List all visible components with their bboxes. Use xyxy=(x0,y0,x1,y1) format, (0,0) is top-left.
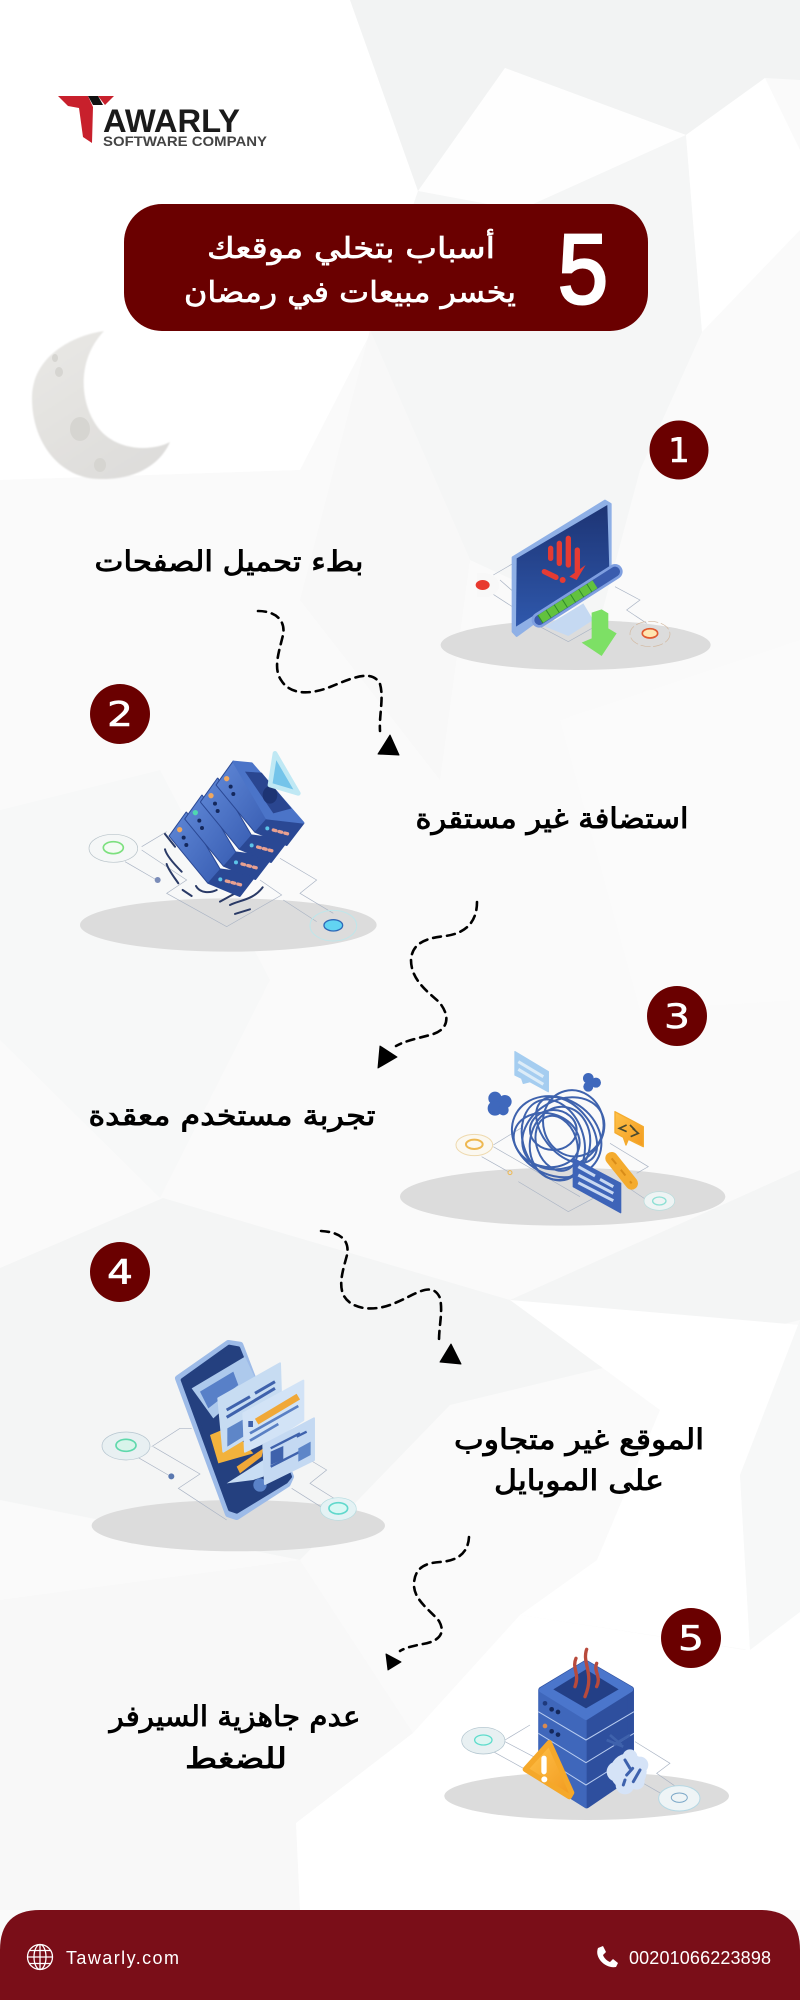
step 2 badge xyxy=(90,684,150,744)
heading text xyxy=(184,228,516,310)
step 4 label: على الموبايل xyxy=(494,1464,664,1497)
step 3 illustration: tangled UX xyxy=(400,1052,725,1226)
logo: Tawarly: SOFTWARE COMPANY xyxy=(103,133,268,149)
step 4 badge xyxy=(90,1242,150,1302)
heading text: يخسر مبيعات في رمضان xyxy=(184,275,516,310)
step 1 badge xyxy=(650,420,708,480)
step 5 label xyxy=(107,1700,360,1775)
step 4 label: الموقع غير متجاوب xyxy=(454,1423,704,1456)
server layer 4 xyxy=(170,813,256,896)
server layer 1 with top xyxy=(217,762,303,845)
server layer 2 xyxy=(201,779,288,862)
step 1 illustration: slow monitor xyxy=(441,501,711,670)
step 5 label: عدم جاهزية السيرفر xyxy=(107,1700,360,1733)
crescent moon xyxy=(32,331,170,479)
step 5 label: للضغط xyxy=(185,1742,287,1775)
footer bar xyxy=(0,1910,800,2000)
step 2 label: استضافة غير مستقرة xyxy=(416,802,688,835)
step 5 illustration: overheated server xyxy=(444,1649,729,1820)
heading text: أسباب بتخلي موقعك xyxy=(207,228,495,266)
step 5 badge: 5 xyxy=(678,1619,704,1659)
server layer 3 xyxy=(185,796,272,879)
step 3 badge: 3 xyxy=(664,997,690,1037)
arrow 2 xyxy=(378,902,477,1068)
big number five: 5 xyxy=(558,214,608,324)
step 3 label: تجربة مستخدم معقدة xyxy=(88,1099,376,1132)
step 1 badge: 1 xyxy=(668,431,690,471)
step 4 illustration: mobile xyxy=(92,1343,385,1551)
icon: globe xyxy=(28,1944,52,1970)
title banner xyxy=(124,204,648,331)
step 1 label: بطء تحميل الصفحات xyxy=(94,545,364,578)
step 2 illustration: unstable server xyxy=(80,753,377,952)
step 5 badge xyxy=(661,1608,721,1668)
icon: phone xyxy=(597,1946,618,1967)
website: Tawarly.com xyxy=(66,1948,179,1968)
logo: Tawarly: AWARLY xyxy=(103,103,240,139)
logo: Tawarly xyxy=(58,96,268,149)
arrow 1 xyxy=(258,611,399,755)
step 2 badge: 2 xyxy=(107,695,133,735)
step 4 badge: 4 xyxy=(107,1253,133,1293)
phone number: 00201066223898 xyxy=(629,1948,771,1968)
arrow 4 xyxy=(386,1537,469,1670)
step 3 badge xyxy=(647,986,707,1046)
step 4 label xyxy=(454,1423,704,1497)
arrow 3 xyxy=(321,1231,461,1364)
